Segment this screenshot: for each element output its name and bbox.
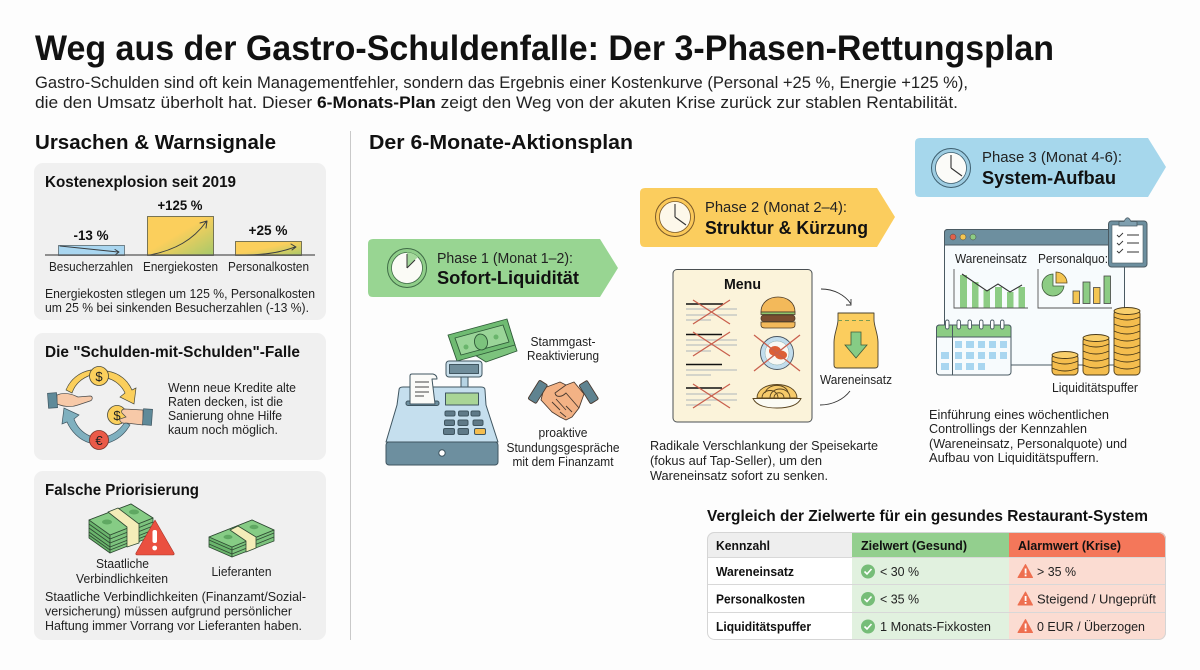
panel text: Haftung immer Vorrang vor Lieferanten haben. xyxy=(45,618,302,633)
icon: handshake xyxy=(528,380,599,420)
icon: big cash stack xyxy=(89,504,153,553)
chart: personalquote xyxy=(1038,269,1112,308)
icon: clock phase 1 xyxy=(388,248,426,288)
intro text xyxy=(35,74,968,112)
panel heading: Schulden-Falle: Die "Schulden-mit-Schulden"-Falle xyxy=(45,344,300,361)
label: Wareneinsatz: Wareneinsatz xyxy=(820,373,892,387)
illustration: dashboard xyxy=(936,218,1147,395)
icon: banknotes xyxy=(448,319,517,362)
text: phase 3: Einführung eines wöchentlichen xyxy=(929,407,1109,422)
row: Wareneinsatz: > 35 % xyxy=(1037,564,1076,579)
label: Stammgast-Reaktivierung xyxy=(527,335,599,363)
label: Stammgast-Reaktivierung: Reaktivierung xyxy=(527,349,599,363)
bar chart: Energiekosten xyxy=(143,260,218,274)
table header xyxy=(716,538,1121,553)
heading: causes: Ursachen & Warnsignale xyxy=(35,131,276,154)
bar chart: +125 % xyxy=(158,197,203,213)
row: Wareneinsatz: Wareneinsatz xyxy=(716,564,794,579)
chart description xyxy=(45,286,315,315)
row: Wareneinsatz: < 30 % xyxy=(880,564,919,579)
panel text: versicherung) müssen aufgrund persönlicher xyxy=(45,604,293,618)
row: Liquiditätspuffer: Liquiditätspuffer xyxy=(716,619,811,634)
intro text: die den Umsatz überholt hat. Dieser 6-Monats-Plan zeigt den Weg von der akuten Krise zurück zur stablen Rentabilität. xyxy=(35,94,958,112)
panel text: Staatliche Verbindlichkeiten (Finanzamt/Sozial- xyxy=(45,589,306,604)
panel heading: Priorisierung: Falsche Priorisierung xyxy=(45,482,199,499)
icon: clock phase 3 xyxy=(932,148,970,188)
icon: crossed plate xyxy=(754,335,800,371)
label: Stundungsgespräche: mit dem Finanzamt xyxy=(512,455,614,469)
chart description: Energiekosten stlegen um 125 %, Personalkosten xyxy=(45,286,315,301)
icon: debt cycle: $ xyxy=(95,369,103,384)
table header: Alarmwert (Krise) xyxy=(1018,538,1121,553)
icon: bag xyxy=(834,313,878,368)
intro text: Gastro-Schulden sind oft kein Managementfehler, sondern das Ergebnis einer Kostenkurve (Personal +25 %, Energie +125 %), xyxy=(35,74,968,92)
row: Personalkosten: Personalkosten xyxy=(716,592,805,606)
icon: small cash stack xyxy=(209,520,274,557)
text: phase 2 xyxy=(650,438,878,483)
icon: burger xyxy=(761,297,795,328)
label: Stundungsgespräche: proaktive xyxy=(538,426,588,440)
phase 2 banner xyxy=(640,188,895,247)
bar chart xyxy=(45,197,315,274)
phase 1 title: Sofort-Liquidität xyxy=(437,267,579,288)
icon: register xyxy=(386,361,498,465)
title: Weg aus der Gastro-Schuldenfalle: Der 3-Phasen-Rettungsplan xyxy=(35,28,1054,68)
panel text xyxy=(45,589,306,633)
heading: action plan: Der 6-Monate-Aktionsplan xyxy=(369,131,633,154)
text: phase 2: (fokus auf Tap-Seller), um den xyxy=(650,453,822,468)
dashboard labels xyxy=(955,252,1108,266)
icon: calendar xyxy=(936,320,1011,375)
icon: pasta xyxy=(753,384,801,408)
bar chart: -13 % xyxy=(74,227,109,243)
panel heading: Kostenexplosion: Kostenexplosion seit 2019 xyxy=(45,174,236,191)
panel: Schulden-mit-Schulden xyxy=(34,333,326,460)
bar chart: Besucherzahlen xyxy=(49,260,133,274)
phase 2 title: Struktur & Kürzung xyxy=(705,217,868,238)
text: phase 3: Controllings der Kennzahlen xyxy=(929,421,1087,436)
phase 3 label: Phase 3 (Monat 4-6): xyxy=(982,149,1122,166)
label: Liquiditätspuffer: Liquiditätspuffer xyxy=(1052,381,1138,395)
row: Liquiditätspuffer: 1 Monats-Fixkosten xyxy=(880,619,991,634)
icon: debt cycle: € xyxy=(95,433,103,448)
panel text: Wenn neue Kredite alte xyxy=(168,380,296,395)
label: Stammgast-Reaktivierung: Stammgast- xyxy=(530,335,596,349)
phase 1 label: Phase 1 (Monat 1–2): xyxy=(437,250,573,267)
icon labels: Verbindlichkeiten xyxy=(76,572,168,586)
text: phase 3: (Wareneinsatz, Personalquote) und xyxy=(929,436,1127,451)
icon: clipboard xyxy=(1108,218,1147,267)
icon: coin stacks xyxy=(1052,308,1140,375)
comparison table xyxy=(707,532,1166,640)
label: Stundungsgespräche xyxy=(506,426,620,469)
row: Personalkosten xyxy=(716,592,1156,606)
table heading: Vergleich der Zielwerte für ein gesundes Restaurant-System xyxy=(707,508,1148,525)
panel text: kaum noch möglich. xyxy=(168,422,278,437)
illustration: menu card xyxy=(673,270,812,422)
phase 1 banner xyxy=(368,239,618,297)
text: phase 3: Aufbau von Liquiditätspuffern. xyxy=(929,450,1099,465)
panel: Kostenexplosion xyxy=(34,163,326,320)
icon: debt cycle xyxy=(48,366,153,450)
phase 3 banner xyxy=(915,138,1166,197)
panel text: Raten decken, ist die xyxy=(168,394,283,409)
row: Liquiditätspuffer xyxy=(716,619,1145,634)
row: Personalkosten: < 35 % xyxy=(880,592,919,606)
chart: wareneinsatz xyxy=(954,269,1028,308)
dashboard labels: Wareneinsatz xyxy=(955,252,1027,266)
icon: debt cycle: $ xyxy=(113,408,121,423)
dashboard labels: Personalquo: xyxy=(1038,252,1108,266)
icon labels: Staatliche xyxy=(96,557,149,571)
table header: Zielwert (Gesund) xyxy=(861,538,967,553)
illustration: cash register xyxy=(386,319,517,465)
menu text lines xyxy=(686,300,737,408)
label: Stundungsgespräche: Stundungsgespräche xyxy=(506,441,620,455)
table header: Kennzahl xyxy=(716,538,770,553)
arrow: to bag xyxy=(821,289,851,305)
panel: Falsche Priorisierung xyxy=(34,471,326,640)
menu heading: Menu xyxy=(724,277,761,293)
chart description: um 25 % bei sinkenden Besucherzahlen (-13 %). xyxy=(45,300,309,315)
icon: warning triangle xyxy=(136,520,174,555)
phase 2 label: Phase 2 (Monat 2–4): xyxy=(705,199,847,216)
panel text: Sanierung ohne Hilfe xyxy=(168,408,282,423)
bar chart: +25 % xyxy=(248,222,288,238)
row: Liquiditätspuffer: 0 EUR / Überzogen xyxy=(1037,619,1145,634)
icon labels: Lieferanten xyxy=(212,565,272,579)
text: phase 2: Radikale Verschlankung der Speisekarte xyxy=(650,438,878,453)
panel text xyxy=(168,380,296,437)
icon labels xyxy=(76,557,272,586)
icon: clock phase 2 xyxy=(656,198,694,236)
text: phase 2: Wareneinsatz sofort zu senken. xyxy=(650,468,828,483)
bar chart: Personalkosten xyxy=(228,260,309,274)
row: Wareneinsatz xyxy=(716,564,1076,579)
text: phase 3 xyxy=(929,407,1127,465)
phase 3 title: System-Aufbau xyxy=(982,167,1116,188)
row: Personalkosten: Steigend / Ungeprüft xyxy=(1037,592,1156,606)
